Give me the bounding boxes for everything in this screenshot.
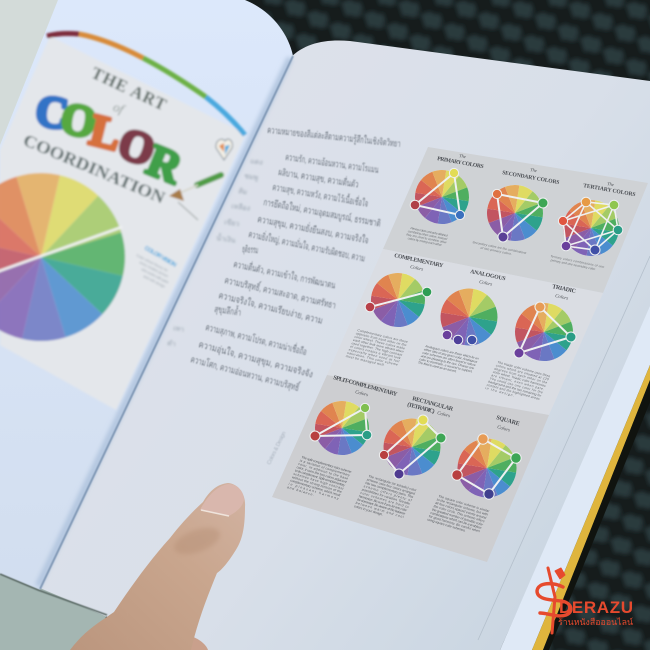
caption: complementary: especially when used at full	[348, 348, 400, 363]
logo: swoosh S mark	[537, 568, 571, 633]
caption: tertiary: primary and one secondary color.	[550, 258, 597, 271]
right page: margin colour names: เขียว	[224, 218, 240, 228]
logo: Thai tagline: ร้านหนังสือออนไลน์	[558, 617, 633, 627]
caption: analogous	[417, 344, 480, 377]
caption: rectangular: color schemes are hard to	[360, 491, 409, 509]
right page: stacked white page edges	[500, 306, 650, 650]
caption: square: The square color scheme is similar	[438, 494, 491, 514]
book bottom edge shadow	[0, 574, 107, 615]
caption: complementary: of colors creates a vibrant look	[349, 344, 402, 360]
heading: secondary colors: The	[530, 167, 537, 173]
caption: rectangular: colors in your design.	[353, 504, 384, 517]
heading: rectangular tetradic colors: Colors	[436, 411, 451, 419]
caption: triadic: You could use one color for the	[489, 376, 544, 394]
caption: split complementary: color, it uses the two colors adjacent	[296, 465, 347, 484]
right page: margin colour names: เทา	[173, 325, 185, 334]
thumb knuckle shading	[171, 522, 223, 560]
caption: rectangular: be dominant. Be aware of the balance	[356, 498, 406, 516]
infographic: small caption: Color wheel theory for	[136, 253, 169, 273]
caption: square: the greatest number of possible color	[431, 508, 485, 527]
caption: complementary: opposite from each other on the	[355, 332, 407, 347]
infographic title: color: O	[57, 93, 100, 148]
background: grey-green surface bottom left	[0, 570, 110, 650]
chart: tertiary wheel	[558, 197, 623, 259]
caption: square: the color circle. This scheme offers	[433, 504, 486, 523]
caption: primary: colors by mixing each other.	[407, 236, 443, 247]
heading: square colors	[495, 415, 520, 434]
caption: square: combinations which can be a problem	[430, 511, 482, 530]
caption: rectangular: The rectangular (or tetradic) color	[368, 474, 418, 493]
right page: Thai body text: ความบริสุทธิ์, ความสะอาด, ความศรัทธา	[223, 272, 338, 312]
caption: split complementary: without the strong tension of the	[291, 475, 343, 494]
caption: split complementary: schemes have high contrast	[293, 472, 344, 491]
left page: gutter shading	[38, 58, 290, 586]
panel: complementary analogous triadic	[327, 249, 603, 415]
infographic: small caption: every creative person	[139, 260, 169, 278]
caption: analogous: color schemes are often found in nature	[422, 351, 477, 367]
spine line	[40, 56, 293, 589]
caption: analogous: Analogous colors are those which lie on	[425, 344, 480, 361]
caption: split complementary: is a variation of complementary	[299, 459, 351, 477]
icon: paint brush	[169, 175, 221, 220]
chart: complementary wheel	[365, 270, 432, 330]
caption: rectangular: scheme uses four colors arranged	[366, 478, 416, 496]
right page: Thai body text: ยุติธรรม	[242, 244, 259, 256]
right page: Thai body text: ความสุข, ความหวัง, ความไว้เนื้อเชื่อใจ	[271, 180, 369, 210]
heading: primary colors: The	[459, 153, 466, 159]
right page: margin colour names: น้ำเงิน	[216, 231, 237, 245]
infographic title: color: O	[112, 118, 161, 176]
chart: split-complementary wheel	[310, 398, 372, 458]
chart: primary wheel	[410, 167, 472, 227]
caption: split complementary: to its complement. Split-complementary	[294, 469, 346, 487]
caption: tertiary: Tertiary colors combinations of one	[550, 254, 605, 269]
heading: split-complementary colors: Colors	[354, 390, 369, 398]
infographic: small caption	[136, 253, 169, 289]
right page: color harmonies chart	[272, 147, 648, 562]
caption: analogous: The third is used as an accent.	[417, 360, 458, 373]
right page: faint vertical running footer: Colors & Design	[266, 431, 288, 466]
caption: square	[426, 494, 491, 537]
caption: complementary: color wheel. These colors make	[354, 335, 406, 350]
caption: secondary: Secondary colors are the combinations	[472, 240, 528, 255]
heading: complementary colors: Colors	[410, 265, 424, 273]
background: pale surface top left	[0, 0, 70, 160]
caption: square: all four colors spaced evenly around	[434, 501, 487, 520]
icon: heart palette badge	[216, 139, 232, 160]
caption: triadic: color wheel. Triadic color harmonies	[492, 370, 547, 388]
right page: Thai body text: ความอุ่นใจ, ความสุขุม, ความจริงจัง	[197, 338, 314, 380]
caption: primary: Primary colors cannot be obtained	[410, 226, 449, 238]
caption: primary: combining other colors, instead	[407, 229, 448, 241]
heading: analogous colors: Colors	[479, 280, 493, 288]
heading: rectangular tetradic colors	[406, 396, 454, 419]
infographic: small caption: and with design	[143, 274, 166, 289]
caption: complementary: used together. The high contrast	[351, 341, 403, 357]
caption: secondary: of two primary colors.	[480, 246, 513, 256]
caption: complementary	[345, 328, 409, 370]
book cover: yellow edge	[532, 365, 650, 650]
nail free edge highlight	[201, 510, 229, 516]
caption: analogous: color to dominate, a second to support.	[419, 357, 474, 374]
caption: rectangular: possibilities for variation. Tetradic	[361, 488, 411, 506]
caption: rectangular: into two complementary pairs. This	[364, 481, 414, 499]
infographic title: color: L	[85, 105, 126, 160]
caption: complementary: each other look more vibrant when	[352, 338, 405, 354]
chart: square wheel	[452, 434, 521, 500]
infographic title: color: R	[140, 135, 190, 194]
infographic title: of: of	[111, 99, 128, 117]
right page: margin colour names: ชมพู	[244, 173, 259, 182]
chart: secondary wheel	[484, 182, 548, 244]
book cover: black edge	[543, 380, 650, 650]
right page: Thai body text: ความยิ่งใหญ่, ความมั่นใจ, ความรับผิดชอบ, ความ	[247, 227, 366, 265]
heading: triadic colors: Colors	[555, 294, 569, 302]
infographic: rainbow header bar	[47, 33, 245, 135]
right page: Thai body text: ความหมายของสีแต่ละสีตามความรู้สึกในเชิงจิตวิทยา	[267, 124, 401, 150]
right page: Thai body text: ความจริงใจ, ความเรียบง่าย, ความ	[217, 289, 324, 327]
infographic: pale background panel	[0, 36, 246, 410]
infographic title: the art: THE ART	[88, 63, 170, 115]
right page: Thai body text: ความตื่นตัว, ความเข้าใจ, การพัฒนาตน	[232, 257, 337, 292]
heading: complementary colors: COMPLEMENTARY	[394, 253, 445, 270]
right page: margin colour names	[167, 158, 263, 348]
panel: primary secondary tertiary	[383, 147, 648, 293]
caption: split complementary: The split-complementary color scheme	[301, 455, 352, 474]
right page: margin colour names: ดำ	[167, 339, 176, 348]
heading: split-complementary colors: SPLIT-COMPLEMENTARY	[332, 375, 398, 398]
headings and captions	[286, 153, 636, 537]
logo: Derazu bookstore	[537, 568, 633, 633]
infographic: big color wheel	[0, 170, 128, 344]
left page	[0, 0, 293, 590]
caption: analogous: and are pleasing to the eye. Choose one	[420, 354, 475, 370]
caption: analogous: either side of any given color. Analogous	[423, 348, 478, 364]
caption: triadic: are vibrant, even when pale.	[491, 373, 545, 391]
heading: rectangular tetradic colors: RECTANGULAR	[411, 396, 454, 413]
heading: square colors: SQUARE	[495, 415, 520, 428]
logo: wordmark: DERAZU	[559, 598, 633, 617]
heading: analogous colors: ANALOGOUS	[470, 269, 506, 282]
heading: triadic colors: TRIADIC	[552, 284, 576, 295]
infographic: blue heading: COLOR VISION	[143, 246, 177, 269]
caption: split complementary: color. In addition to the base	[297, 462, 349, 481]
heading: primary colors: PRIMARY COLORS	[437, 156, 484, 170]
chart: triadic wheel	[512, 300, 576, 364]
caption: triadic: degrees from each other on the	[494, 367, 548, 385]
second finger	[188, 636, 208, 650]
heading: tertiary colors: The	[607, 181, 614, 187]
caption: square: to the rectangular scheme, but with	[436, 498, 489, 517]
infographic title: coordination: COORDINATION	[20, 130, 169, 208]
infographic: small caption: who works with paint	[141, 267, 169, 285]
infographic title: color: C	[33, 85, 72, 139]
caption: primary	[404, 226, 450, 248]
caption: triadic: background and the two remaining for	[488, 380, 543, 398]
infographic title: color	[33, 85, 190, 194]
right page: margin colour names: แดง	[250, 158, 263, 167]
caption: split complementary: complementary scheme, which result	[289, 479, 341, 497]
right page: Thai body text: ความสุภาพ, ความโปรด, ความน่าเชื่อถือ	[204, 320, 308, 358]
right page: Thai body text: การยึดถือใหม่, ความอุดมสมบูรณ์, ธรรมชาติ	[262, 196, 382, 230]
caption: rectangular: between warm and cool	[355, 501, 405, 519]
caption: triadic: The triadic color scheme uses three	[497, 360, 551, 378]
caption: complementary: Complementary colors are those	[357, 328, 409, 344]
heading: square colors: Colors	[496, 425, 511, 434]
caption: split complementary: and balance.	[286, 485, 315, 497]
caption: split complementary	[286, 455, 352, 504]
caption: rectangular: harmonize. Be sure if you let one color	[358, 494, 409, 513]
caption: rectangular: scheme offers plenty of	[363, 484, 413, 502]
thumb body	[70, 483, 245, 650]
caption: triadic	[484, 360, 552, 404]
right page: Thai body text: ความโศก, ความอ่อนหวาน, ความบริสุทธิ์	[189, 351, 302, 394]
right page: margin colour names: ส้ม	[238, 187, 248, 196]
caption: complementary: must be managed well.	[345, 354, 386, 367]
heading: secondary colors: SECONDARY COLORS	[502, 170, 560, 186]
left page: infographic	[0, 33, 246, 410]
right page: fold line	[478, 256, 650, 640]
caption: square: using square color schemes.	[426, 518, 467, 533]
right page: margin colour names: เหลือง	[231, 202, 251, 213]
thumb nail	[200, 484, 244, 516]
panel: split rectangular square	[272, 375, 549, 562]
caption: triadic: in the design.	[484, 386, 515, 398]
right page: Thai body text: ความรัก, ความอ้อนหวาน, ความโรแมน	[285, 151, 380, 176]
wheel divider line	[0, 227, 122, 273]
heading: triadic colors	[552, 284, 576, 302]
heading: rectangular tetradic colors: (TETRADIC)	[406, 401, 435, 415]
right page: Thai body text: ผลิบาน, ความสุข, ความตื่นตัว	[278, 165, 360, 191]
right page: Thai body text: สุขุมลึกล้ำ	[214, 302, 242, 319]
caption: triadic: content and the highlighted areas	[486, 383, 541, 401]
right page: Thai body text	[189, 124, 401, 394]
heading: tertiary colors: TERTIARY COLORS	[583, 183, 636, 198]
hand: thumb	[70, 483, 245, 650]
caption: complementary: saturation. This color scheme	[347, 351, 399, 367]
caption: split complementary: in pleasant harmony	[288, 482, 340, 501]
caption: primary: they are used to combine other	[406, 233, 447, 244]
right page: Thai body text: ความสุขุม, ความยั่งยืนสงบ, ความจริงใจ	[256, 212, 370, 247]
chart: rectangular wheel	[379, 415, 446, 479]
caption: square: for good harmony. Be careful when	[428, 514, 481, 533]
caption: rectangular	[353, 474, 418, 523]
caption: triadic: colors which are situated at 120	[495, 364, 550, 381]
chart: analogous wheel	[438, 286, 500, 348]
